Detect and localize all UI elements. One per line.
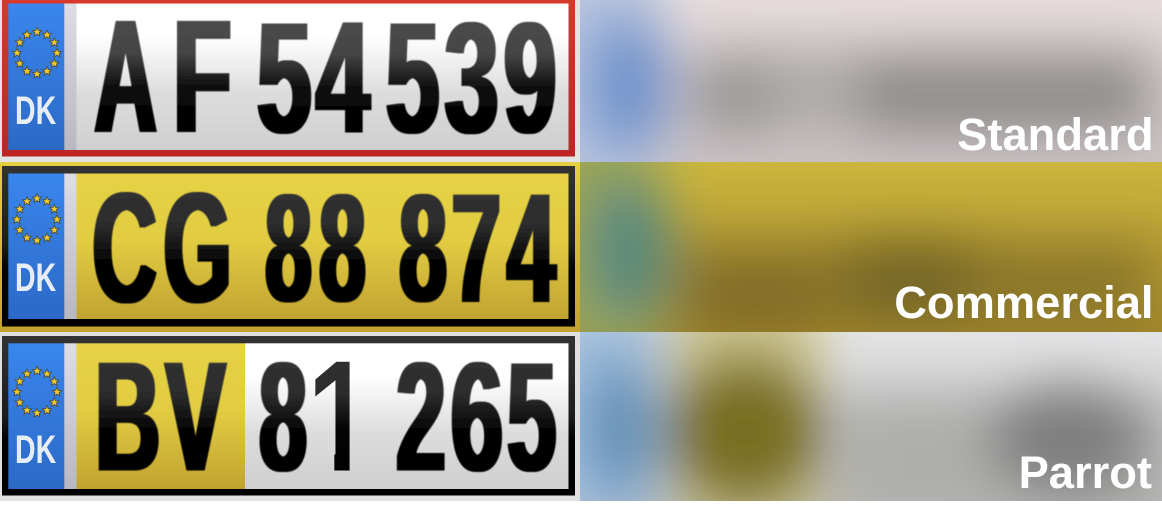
- plate: standard grey strip: [64, 4, 76, 150]
- icon: EU stars: [12, 27, 62, 78]
- plate number AF 54539: [94, 0, 556, 167]
- panel: parrot plate row: [0, 327, 580, 505]
- country code DK: DK: [15, 89, 56, 133]
- panel: commercial blurred background with label: [580, 162, 1162, 332]
- plate: standard EU blue band: [8, 4, 64, 150]
- plate: parrot EU blue band: [8, 343, 64, 489]
- plate number CG 88 874: 4: [507, 161, 555, 335]
- plate: parrot grey strip: [64, 343, 76, 489]
- plate: parrot yellow field: [76, 343, 245, 489]
- plate number BV 81 265: B: [95, 329, 160, 505]
- plate number CG 88 874: C: [92, 160, 157, 336]
- label: Commercial: Commercial: [894, 277, 1154, 328]
- plate number BV 81 265: 6: [451, 331, 503, 504]
- country code DK: DK: [15, 256, 56, 300]
- plate number BV 81 265: 1: [307, 327, 375, 504]
- panel: standard plate row: [0, 0, 580, 167]
- panel: parrot blurred background with label: [580, 332, 1162, 501]
- plate: parrot white field: [245, 343, 568, 489]
- label: Parrot: Parrot: [1019, 447, 1152, 498]
- panel: standard blurred background with label: [580, 0, 1162, 162]
- plate number CG 88 874: G: [164, 160, 232, 335]
- plate number CG 88 874: 8: [265, 163, 312, 335]
- icon: EU stars: [12, 194, 62, 244]
- plate: commercial grey strip: [64, 174, 76, 319]
- plate: commercial EU blue band: [8, 174, 64, 319]
- plate: parrot black border: [2, 336, 575, 496]
- icon: EU stars: [12, 366, 62, 417]
- plate number BV 81 265: 5: [507, 330, 556, 504]
- plate number CG 88 874: 8: [319, 163, 366, 335]
- plate number CG 88 874: [92, 160, 555, 336]
- panel: commercial plate row: [0, 160, 580, 336]
- plate number BV 81 265: 2: [396, 329, 446, 504]
- plate number BV 81 265: 8: [259, 329, 307, 504]
- plate number BV 81 265: [98, 361, 557, 473]
- country code DK: DK: [15, 428, 56, 472]
- plate: standard red border: [2, 0, 575, 156]
- plate number BV 81 265: V: [166, 329, 226, 505]
- plate number CG 88 874: 8: [399, 164, 447, 334]
- plate: commercial yellow field: [76, 174, 568, 319]
- plate: commercial black border: [2, 166, 575, 326]
- plate: standard white field: [76, 4, 568, 150]
- plate number CG 88 874: 7: [452, 160, 501, 335]
- label: Standard: Standard: [957, 109, 1154, 160]
